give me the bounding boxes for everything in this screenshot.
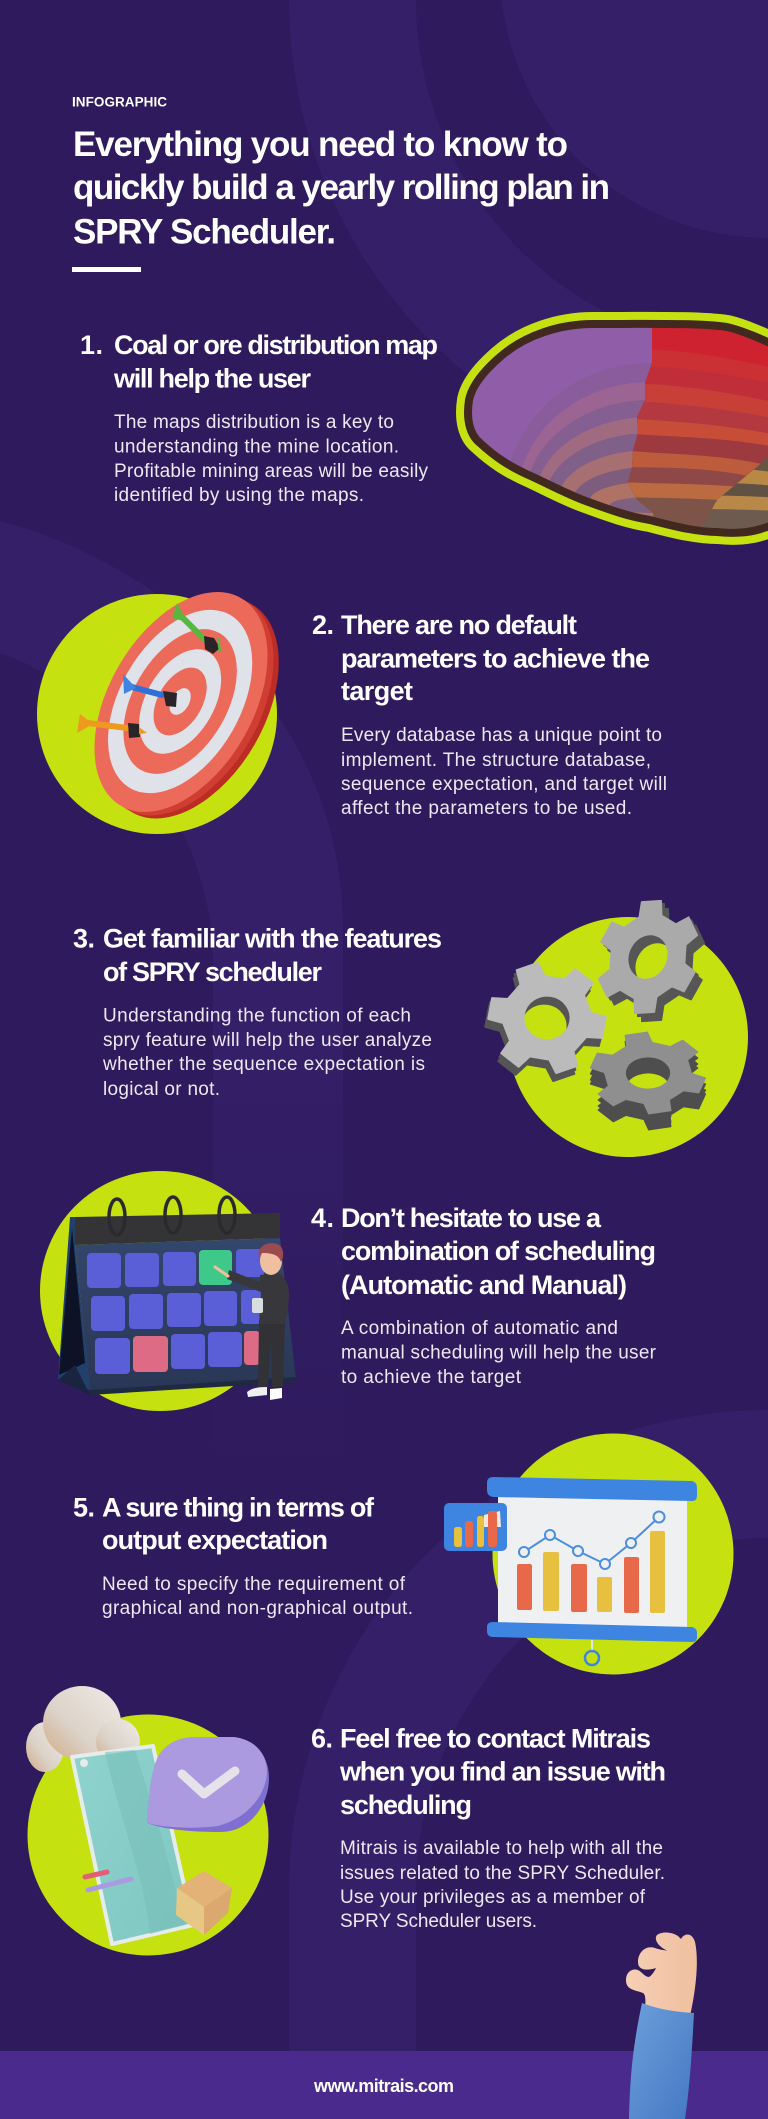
panel: item 5 text: output expectation <box>102 1525 328 1555</box>
clouds <box>26 1686 140 1772</box>
person <box>215 1243 289 1400</box>
panel: item 4 text: 4. <box>311 1203 334 1233</box>
panel: item 2 text: implement. The structure database, <box>341 750 651 771</box>
panel: item 6 text: issues related to the SPRY Scheduler. <box>340 1863 665 1884</box>
notification bars <box>85 1872 131 1890</box>
illustration: hand <box>626 1932 697 2119</box>
footer bar <box>0 2051 768 2119</box>
panel: item 4 text: manual scheduling will help the user <box>341 1342 657 1364</box>
chart top roller <box>487 1477 697 1501</box>
illustration: gears <box>478 884 748 1157</box>
panel: item 1 text: Coal or ore distribution map <box>114 330 438 360</box>
dart: blue <box>123 674 177 707</box>
panel: item 6 text: Feel free to contact Mitrais <box>340 1724 651 1754</box>
panel: item 5 text: Need to specify the requirement of <box>102 1574 406 1595</box>
panel: item 6 text: 6. <box>311 1724 333 1754</box>
panel: item 4 text: (Automatic and Manual) <box>341 1270 627 1300</box>
phone <box>72 1746 193 1944</box>
panel: item 3 text: spry feature will help the user analyze <box>103 1030 432 1051</box>
title <box>73 125 610 252</box>
panel: item 5 text: A sure thing in terms of <box>102 1492 375 1522</box>
panel: item 3 text: whether the sequence expectation is <box>102 1054 425 1075</box>
panel: item 1 text: 1. <box>80 330 103 360</box>
panel: item 1 text: will help the user <box>113 364 311 394</box>
dart: orange <box>77 714 147 738</box>
panel: item 5 text: 5. <box>73 1492 95 1522</box>
panel: item 6 text <box>311 1724 666 1932</box>
panel: item 2 text: target <box>341 676 413 706</box>
title: Everything you need to know to <box>73 125 568 164</box>
panel: item 6 text: when you find an issue with <box>339 1756 666 1786</box>
panel: item 6 text: scheduling <box>340 1790 472 1820</box>
title: quickly build a yearly rolling plan in <box>73 168 610 207</box>
panel: item 2 text: There are no default <box>341 610 577 640</box>
panel: item 2 text: affect the parameters to be used. <box>341 798 632 819</box>
pull ring <box>585 1640 599 1665</box>
panel: item 4 text: Don’t hesitate to use a <box>341 1203 602 1233</box>
panel: item 3 text: 3. <box>73 924 95 954</box>
gear: bottom right <box>577 1024 719 1138</box>
illustration: coal distribution map <box>456 312 768 545</box>
illustration: presentation chart <box>444 1434 734 1674</box>
gear: left <box>478 957 613 1087</box>
panel: item 2 text: parameters to achieve the <box>341 644 650 674</box>
panel: item 2 text: Every database has a unique point to <box>341 725 662 746</box>
panel: item 2 text <box>312 610 667 819</box>
line chart <box>519 1512 664 1569</box>
panel: item 4 text: combination of scheduling <box>341 1236 656 1266</box>
illustration: phone with check bubble <box>26 1686 269 1956</box>
panel: item 1 text: The maps distribution is a key to <box>114 412 394 433</box>
panel: item 4 text <box>311 1203 657 1388</box>
gear: top right <box>580 884 723 1038</box>
panel: item 4 text: to achieve the target <box>341 1367 522 1388</box>
chart bottom roller <box>487 1622 697 1642</box>
eyebrow label: INFOGRAPHIC <box>72 94 167 110</box>
title: SPRY Scheduler. <box>73 212 336 252</box>
panel: item 2 text: 2. <box>312 610 334 640</box>
panel: item 3 text: Understanding the function of each <box>103 1006 411 1026</box>
panel: item 1 text: understanding the mine location. <box>114 436 399 458</box>
calendar rings <box>109 1197 235 1235</box>
panel: item 6 text: Use your privileges as a member of <box>340 1887 646 1908</box>
footer url: www.mitrais.com <box>313 2076 454 2096</box>
panel: item 5 text: graphical and non-graphical output. <box>102 1598 413 1619</box>
box <box>176 1871 232 1935</box>
panel: item 2 text: sequence expectation, and target will <box>341 774 667 795</box>
panel: item 6 text: Mitrais is available to help with all the <box>340 1838 663 1859</box>
panel: item 3 text: logical or not. <box>103 1079 220 1100</box>
panel: item 3 text: of SPRY scheduler <box>103 957 322 987</box>
panel: item 6 text: SPRY Scheduler users. <box>340 1911 537 1932</box>
panel: item 3 text: Get familiar with the features <box>103 924 442 954</box>
panel: item 1 text: identified by using the maps. <box>114 485 364 506</box>
panel: item 3 text <box>73 924 442 1100</box>
illustration: calendar with person <box>40 1171 296 1411</box>
panel: item 1 text <box>80 330 438 506</box>
title underline <box>72 267 141 272</box>
small chart card <box>444 1503 507 1551</box>
panel: item 1 text: Profitable mining areas will be easily <box>114 461 428 482</box>
illustration: target with darts <box>37 562 315 848</box>
calendar tiles <box>87 1249 264 1374</box>
dart: green <box>172 603 220 654</box>
panel: item 5 text <box>73 1492 413 1619</box>
panel: item 4 text: A combination of automatic and <box>341 1318 618 1339</box>
bar chart <box>517 1531 665 1613</box>
speech bubble with check <box>147 1737 269 1832</box>
